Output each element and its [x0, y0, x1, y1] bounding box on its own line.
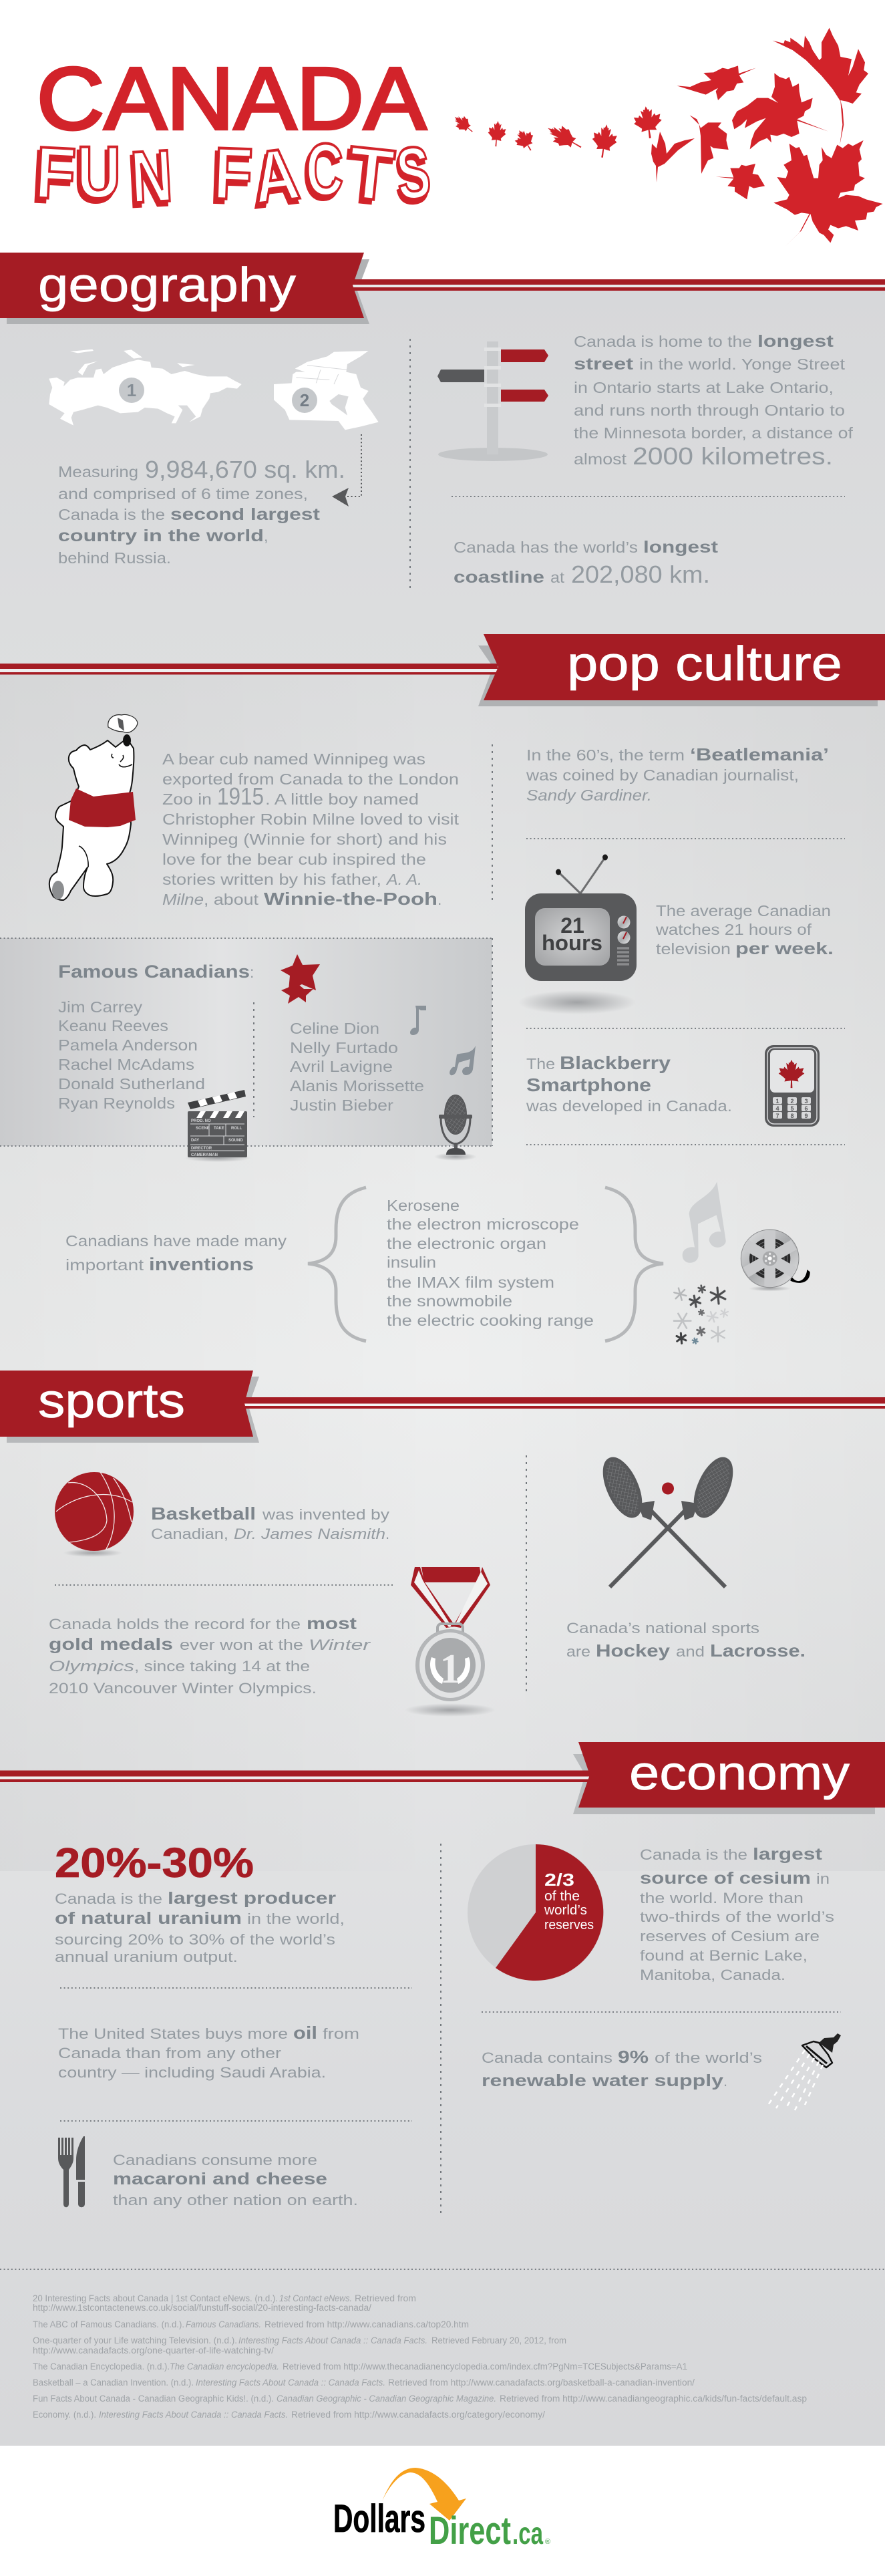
icon: medal: 1	[439, 1647, 461, 1692]
icon: smartphone: 4	[775, 1105, 779, 1112]
text: names column 1	[58, 998, 205, 1112]
text: Canada size: Measuring	[58, 463, 138, 480]
text: references: Canadian Geographic - Canadian Geographic Magazine.	[277, 2394, 496, 2404]
text: longest coastline	[454, 538, 719, 588]
icon: Winnie-the-Pooh	[49, 715, 138, 900]
text: Canada size: second largest	[170, 505, 321, 524]
text: oil: oil	[293, 2023, 317, 2043]
text: names column 1: Ryan Reynolds	[58, 1095, 175, 1112]
text: national sports: Canada’s national sports	[566, 1620, 759, 1636]
text: Canada size	[58, 456, 345, 567]
divider	[440, 1844, 441, 2218]
text: gold medals: 2010 Vancouver Winter Olympics.	[49, 1680, 317, 1697]
text: cesium: largest	[753, 1845, 823, 1864]
text: references: Retrieved from http://www.canadafacts.org/basketball-a-canadian-invention/	[388, 2378, 695, 2388]
text: cesium: Manitoba, Canada.	[640, 1967, 785, 1983]
text: oil: country — including Saudi Arabia.	[58, 2064, 326, 2081]
icon: falling maple leaves	[450, 28, 883, 247]
text: references: The ABC of Famous Canadians. (n.d.).	[33, 2319, 184, 2329]
text: names column 2: Justin Bieber	[290, 1097, 393, 1114]
text: gold medals: , since taking 14 at the	[134, 1658, 310, 1675]
text: gold medals: most	[307, 1614, 357, 1633]
divider	[482, 2011, 841, 2013]
text: names column 1: Donald Sutherland	[58, 1075, 205, 1093]
text: references: Interesting Facts About Canada :: Canada Facts.	[99, 2410, 288, 2420]
text: names column 1: Pamela Anderson	[58, 1036, 198, 1054]
icon: smartphone: 2	[790, 1098, 794, 1105]
text: water supply: of the world’s	[655, 2049, 762, 2066]
icon: television: 21	[560, 913, 584, 938]
text: inventions list	[387, 1197, 594, 1329]
icon: clapperboard: DIRECTOR	[191, 1147, 212, 1151]
text: cesium: in	[816, 1870, 830, 1887]
divider	[55, 1584, 393, 1586]
text: Winnie story: 1915	[217, 782, 264, 810]
text: references: Retrieved from http://www.canadafacts.org/category/economy/	[291, 2410, 545, 2420]
text: Winnie story: Zoo in	[162, 791, 212, 808]
text: Blackberry: was developed in Canada.	[526, 1097, 732, 1115]
text: cesium: Canada is the	[640, 1846, 747, 1863]
text: names column 2	[290, 1020, 424, 1114]
divider	[409, 339, 411, 588]
text: uranium: annual uranium output.	[55, 1949, 238, 1965]
text: Beatlemania: was coined by Canadian journalist,	[526, 766, 799, 784]
text: references	[33, 2293, 807, 2420]
divider	[526, 838, 845, 839]
icon: clapperboard: PROD. NO	[191, 1119, 211, 1123]
text: oil: from	[323, 2025, 359, 2042]
title: FUN FACTS: N	[126, 139, 172, 223]
title: FUN FACTS: F	[33, 132, 77, 216]
icon: clapperboard	[184, 1090, 251, 1162]
text: references: Economy. (n.d.).	[33, 2410, 96, 2420]
icon: clapperboard: ROLL	[231, 1127, 242, 1131]
text: longest coastline: Canada has the world’s	[454, 539, 638, 556]
text: macaroni	[113, 2152, 358, 2208]
title: CANADA: CANADA	[37, 49, 426, 148]
text: names column 1: Rachel McAdams	[58, 1056, 194, 1073]
icon: smartphone	[765, 1045, 820, 1127]
text: Winnie story: Winnie-the-Pooh	[264, 889, 437, 909]
economy heading banner: economy	[629, 1747, 850, 1800]
icon: smartphone: 5	[790, 1105, 794, 1112]
text: Blackberry: The	[526, 1055, 555, 1072]
text: gold medals: Olympics	[49, 1658, 134, 1675]
text: water supply	[482, 2047, 762, 2090]
text: oil: Canada than from any other	[58, 2045, 281, 2061]
pop culture heading banner: pop culture	[567, 637, 842, 691]
text: cesium: source of cesium	[640, 1869, 811, 1888]
divider	[526, 1144, 845, 1145]
icon: clapperboard: SOUND	[228, 1139, 243, 1143]
text: inventions intro	[65, 1232, 287, 1274]
icon: smartphone: 1	[775, 1098, 779, 1105]
text: references: Fun Facts About Canada - Canadian Geographic Kids!. (n.d.).	[33, 2394, 274, 2404]
icon: smartphone: 7	[775, 1113, 779, 1119]
text: television hours: The average Canadian	[656, 902, 831, 919]
text: references: One-quarter of your Life watching Television. (n.d.).	[33, 2335, 237, 2345]
text: longest street: almost	[574, 450, 627, 468]
logo: Dollars Direct: Dollars	[333, 2497, 425, 2541]
text: references: http://www.1stcontactenews.co.uk/social/funstuff-social/20-interesting-facts-canada/	[33, 2303, 371, 2313]
text: water supply: 9%	[618, 2047, 649, 2067]
text: longest street	[574, 332, 854, 470]
text: inventions list: the electron microscope	[387, 1215, 579, 1233]
icon: lacrosse sticks	[597, 1453, 739, 1587]
icon: shower head	[768, 2033, 841, 2110]
text: names column 2: Nelly Furtado	[290, 1039, 398, 1056]
text: oil: The United States buys more	[58, 2025, 288, 2042]
text: longest coastline: at	[550, 569, 565, 586]
text: water supply: renewable water supply	[482, 2071, 723, 2090]
icon: smartphone: 8	[790, 1113, 794, 1119]
logo: Dollars Direct	[333, 2468, 550, 2553]
icon: snowflakes	[672, 1285, 729, 1344]
text: uranium: Canada is the	[55, 1890, 162, 1907]
heading: Famous Canadians: :	[250, 964, 254, 981]
title: FUN FACTS: T	[344, 131, 397, 217]
map: Russia and Canada: 1	[127, 380, 136, 400]
text: Winnie story: Milne	[162, 891, 204, 908]
text: cesium: reserves of Cesium are	[640, 1928, 820, 1945]
text: references: Retrieved February 20, 2012, from	[431, 2335, 566, 2345]
text: Blackberry	[526, 1052, 732, 1115]
text: references: Retrieved from	[355, 2293, 416, 2303]
text: gold medals	[49, 1614, 371, 1697]
text: basketball: .	[385, 1526, 389, 1542]
icon: stars	[281, 954, 320, 1004]
icon: clapperboard: TAKE	[214, 1127, 224, 1131]
icon: left brace	[308, 1187, 366, 1341]
geography heading banner	[0, 253, 885, 324]
text: television hours: watches 21 hours of	[655, 921, 812, 938]
logo: Dollars Direct: ®	[545, 2538, 550, 2546]
text: basketball: Dr. James Naismith	[234, 1526, 385, 1542]
title: FUN FACTS: S	[393, 131, 433, 216]
divider	[452, 496, 845, 497]
text: gold medals: Canada holds the record for the	[49, 1616, 301, 1632]
icon: music notes	[410, 1006, 476, 1075]
icon: signpost	[437, 341, 548, 461]
title: FUN FACTS: U	[77, 132, 121, 214]
text: references: Basketball – a Canadian Invention. (n.d.).	[33, 2378, 194, 2388]
text: Winnie story	[162, 750, 460, 909]
title: FUN FACTS: C	[303, 133, 341, 215]
text: longest street: street	[574, 355, 634, 374]
text: macaroni: Canadians consume more	[113, 2152, 317, 2168]
icon: smartphone: 9	[804, 1113, 808, 1119]
icon: microphone	[434, 1095, 477, 1161]
icon: basketball	[55, 1472, 134, 1557]
title: FUN FACTS: N	[129, 134, 174, 219]
text: Canada size: 9,984,670 sq. km.	[145, 456, 345, 483]
icon: clapperboard: CAMERAMAN	[191, 1153, 218, 1157]
text: longest street: the Minnesota border, a distance of	[574, 424, 854, 442]
text: Beatlemania: Sandy Gardiner.	[526, 786, 652, 804]
title: FUN FACTS: S	[391, 135, 432, 220]
text: inventions list: the IMAX film system	[387, 1274, 554, 1291]
title: FUN FACTS: A	[246, 136, 301, 224]
title: FUN FACTS: F	[210, 136, 251, 220]
text: Canada size: Canada is the	[58, 506, 165, 523]
text: gold medals: ever won at the	[180, 1636, 303, 1653]
text: longest coastline: 202,080 km.	[571, 561, 710, 588]
text: inventions list: Kerosene	[387, 1197, 460, 1214]
text: Winnie story: Winnipeg (Winnie for short) and his	[162, 831, 447, 848]
sports heading banner: sports	[38, 1375, 185, 1428]
text: uranium: largest producer	[168, 1889, 336, 1908]
chart: cesium reserves pie: 2/3	[544, 1870, 574, 1890]
text: references: Interesting Facts About Canada :: Canada Facts.	[238, 2335, 427, 2345]
text: references: http://www.canadafacts.org/one-quarter-of-life-watching-tv/	[33, 2345, 274, 2355]
logo: Dollars Direct: .ca	[512, 2516, 543, 2551]
title: FUN FACTS: F	[31, 135, 75, 219]
text: Winnie story: love for the bear cub inspired the	[162, 851, 426, 868]
logo: Dollars Direct: Direct	[429, 2509, 511, 2553]
text: national sports: Lacrosse.	[710, 1640, 806, 1661]
text: references: 1st Contact eNews.	[279, 2293, 352, 2303]
text: uranium: in the world,	[247, 1910, 345, 1927]
panel: famous Canadians	[0, 938, 492, 1162]
text: Winnie story: .	[437, 891, 441, 908]
icon: medal	[405, 1567, 496, 1717]
text: television hours: per week.	[735, 940, 834, 958]
text: Winnie story: A. A.	[385, 871, 422, 888]
chart: cesium reserves pie	[468, 1844, 604, 1981]
chart: cesium reserves pie: world’s	[544, 1903, 587, 1918]
text: television hours: television	[656, 940, 731, 958]
text: references: 20 Interesting Facts about Canada | 1st Contact eNews. (n.d.).	[33, 2293, 278, 2303]
text: references: Interesting Facts About Canada :: Canada Facts.	[196, 2378, 385, 2388]
heading: Famous Canadians: Famous Canadians	[58, 962, 250, 982]
text: references: Retrieved from http://www.canadians.ca/top20.htm	[264, 2319, 469, 2329]
text: inventions intro: important	[65, 1256, 144, 1274]
stat: 20%-30%: 20%-30%	[55, 1840, 254, 1886]
text: Winnie story: . A little boy named	[265, 791, 419, 808]
text: names column 2: Avril Lavigne	[290, 1058, 393, 1075]
icon: smartphone: 3	[804, 1098, 808, 1105]
text: inventions list: the snowmobile	[387, 1292, 512, 1310]
text: uranium	[55, 1840, 345, 1965]
divider	[0, 2269, 885, 2270]
title: FUN FACTS: U	[74, 136, 118, 218]
text: cesium: found at Bernic Lake,	[640, 1947, 808, 1964]
text: longest street: 2000 kilometres.	[633, 442, 833, 470]
sports heading banner	[0, 1371, 885, 1443]
text: references: Famous Canadians.	[186, 2319, 261, 2329]
divider	[60, 2120, 412, 2122]
text: Winnie story: exported from Canada to the London	[162, 770, 459, 788]
text: references: The Canadian Encyclopedia. (n.d.).	[33, 2362, 170, 2372]
text: names column 1: Keanu Reeves	[58, 1017, 168, 1034]
icon: film reel	[741, 1230, 810, 1291]
text: longest coastline: longest	[643, 538, 719, 557]
text: Beatlemania: In the 60’s, the term	[526, 746, 685, 764]
divider	[526, 1028, 845, 1029]
text: references: Retrieved from http://www.thecanadianencyclopedia.com/index.cfm?PgNm=TCESubjects&Params=A1	[283, 2362, 687, 2372]
arrow: from map to text	[332, 434, 361, 507]
text: basketball: Basketball	[151, 1504, 256, 1524]
icon: television	[518, 854, 637, 1014]
text: names column 2: Alanis Morissette	[290, 1077, 424, 1095]
text: Winnie story: stories written by his father,	[162, 871, 381, 888]
text: Canada size: ,	[264, 527, 268, 545]
text: Canada size: behind Russia.	[58, 549, 171, 567]
text: longest street: in Ontario starts at Lake Ontario,	[574, 379, 834, 396]
title: FUN FACTS: A	[248, 132, 303, 219]
text: references: Retrieved from http://www.canadiangeographic.ca/kids/fun-facts/default.asp	[500, 2394, 807, 2404]
title: FUN FACTS	[31, 129, 433, 224]
text: inventions list: insulin	[387, 1254, 436, 1271]
text: basketball: Canadian,	[151, 1526, 228, 1542]
icon: fork and knife	[58, 2136, 85, 2207]
text: longest street: in the world. Yonge Street	[639, 355, 846, 373]
text: Beatlemania	[526, 744, 829, 804]
chart: cesium reserves pie: of the	[544, 1889, 580, 1904]
text: inventions intro: Canadians have made many	[65, 1232, 287, 1250]
map: Russia and Canada: 2	[300, 390, 309, 410]
text: gold medals: gold medals	[49, 1635, 173, 1654]
text: longest street: and runs north through Ontario to	[574, 402, 845, 419]
text: uranium: of natural uranium	[55, 1909, 242, 1928]
icon: television: hours	[542, 931, 602, 955]
text: uranium: sourcing 20% to 30% of the world’s	[55, 1931, 335, 1948]
text: oil	[58, 2023, 359, 2081]
text: longest street: longest	[757, 332, 834, 351]
title: FUN FACTS: C	[306, 129, 343, 211]
text: cesium: the world. More than	[640, 1890, 804, 1906]
map: Russia and Canada	[49, 349, 379, 430]
text: cesium	[640, 1845, 834, 1983]
text: names column 2: Celine Dion	[290, 1020, 379, 1037]
text: national sports: are	[566, 1643, 590, 1660]
chart: cesium reserves pie: reserves	[544, 1918, 594, 1933]
title: FUN FACTS: T	[341, 134, 395, 221]
economy heading banner	[0, 1742, 885, 1814]
icon: clapperboard: SCENE	[196, 1127, 210, 1131]
text: national sports	[566, 1620, 806, 1661]
text: water supply: Canada contains	[482, 2049, 612, 2066]
text: inventions intro: inventions	[149, 1254, 254, 1274]
text: basketball	[151, 1504, 389, 1542]
text: Winnie story: A bear cub named Winnipeg was	[162, 750, 425, 768]
divider	[60, 1987, 412, 1989]
text: Blackberry: Blackberry	[560, 1052, 671, 1073]
icon: clapperboard: DAY	[191, 1139, 199, 1143]
text: cesium: two-thirds of the world’s	[640, 1908, 834, 1925]
text: macaroni: than any other nation on earth.	[113, 2192, 358, 2208]
text: names column 1: Jim Carrey	[58, 998, 143, 1016]
text: national sports: Hockey	[596, 1640, 671, 1661]
divider	[526, 1455, 527, 1695]
icon: right brace	[605, 1187, 663, 1341]
text: Blackberry: Smartphone	[526, 1075, 651, 1095]
title: FUN FACTS: F	[212, 132, 254, 216]
text: inventions list: the electronic organ	[387, 1235, 546, 1252]
divider	[492, 744, 493, 902]
text: Winnie story: , about	[204, 891, 259, 908]
text: macaroni: macaroni and cheese	[113, 2170, 327, 2188]
pop culture heading banner	[0, 634, 885, 706]
text: national sports: and	[676, 1643, 705, 1660]
text: television hours	[655, 902, 834, 958]
text: inventions list: the electric cooking range	[387, 1312, 594, 1329]
text: basketball: was invented by	[262, 1506, 389, 1523]
text: references: The Canadian encyclopedia.	[170, 2362, 279, 2372]
text: water supply: .	[723, 2073, 727, 2090]
text: longest street: Canada is home to the	[574, 333, 752, 350]
text: longest coastline: coastline	[454, 568, 544, 587]
icon: smartphone: 6	[804, 1105, 808, 1112]
geography heading banner: geography	[38, 259, 296, 312]
text: Winnie story: Christopher Robin Milne loved to visit	[162, 811, 460, 828]
icon: big music note	[683, 1181, 726, 1263]
text: Beatlemania: ‘Beatlemania’	[690, 744, 829, 764]
text: Canada size: country in the world	[58, 527, 264, 545]
text: gold medals: Winter	[309, 1636, 371, 1653]
text: Canada size: and comprised of 6 time zones,	[58, 485, 308, 503]
